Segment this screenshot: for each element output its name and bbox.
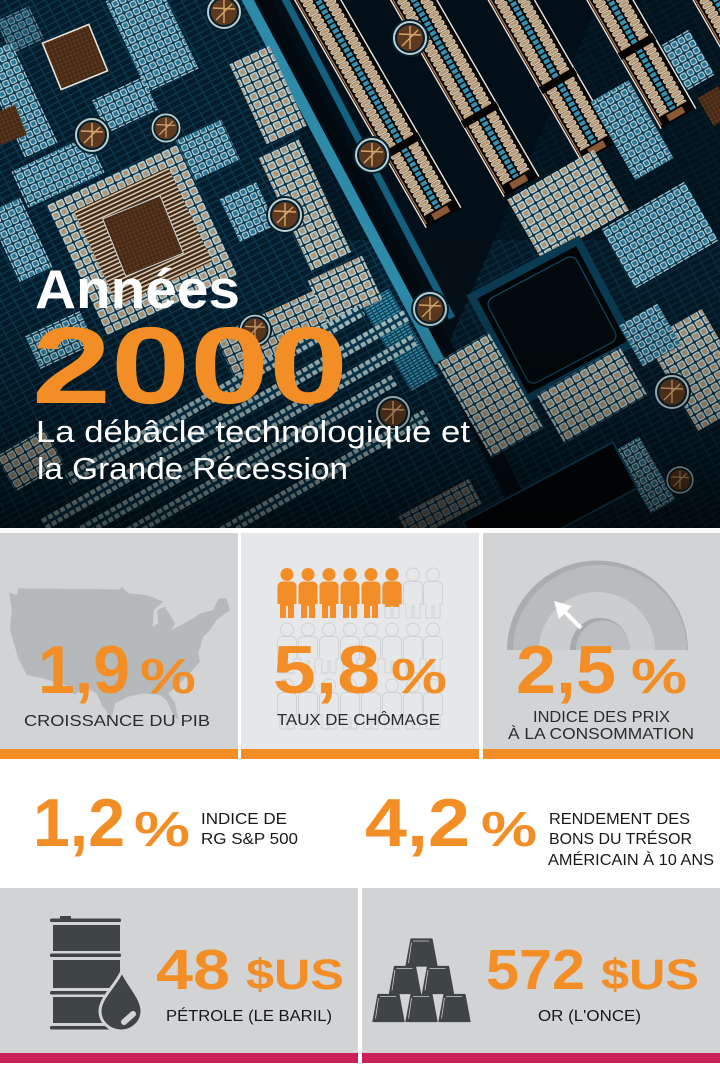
panel: or — [362, 888, 720, 1063]
icon: gauge — [507, 561, 688, 650]
panel: indice des prix à la consommation — [483, 533, 720, 759]
stat: rendement des bons du Trésor: % — [481, 803, 537, 857]
panel: pétrole — [0, 888, 358, 1063]
stat: rendement des bons du Trésor: RENDEMENT DES — [549, 811, 690, 828]
value: 2,5 %: 2,5 — [516, 632, 616, 708]
value: 2,5 %: % — [631, 650, 687, 704]
value: 572 $US: 572 — [486, 938, 585, 1002]
value: 1,9 %: % — [140, 650, 196, 704]
pad clusters — [105, 0, 199, 92]
title: 2000: 2000 — [32, 305, 348, 427]
icon: map of the United States — [9, 587, 230, 720]
teal strips — [245, 0, 440, 362]
value: 5,8 %: % — [391, 650, 447, 704]
stat: rendement des bons du Trésor: AMÉRICAIN À 10 ANS — [548, 850, 714, 869]
stat: indice de RG S&P 500 — [33, 785, 298, 861]
black chip — [472, 241, 632, 399]
right clusters — [507, 150, 629, 260]
label: indice des prix — [508, 709, 694, 743]
icon: people grid — [278, 568, 442, 729]
stat: rendement des bons du Trésor — [365, 785, 714, 869]
panel: or: $US — [601, 951, 699, 999]
stat: rendement des bons du Trésor: 4,2 — [365, 785, 470, 861]
icon: gold bars — [373, 939, 470, 1022]
subtitle: la Grande Récession — [37, 451, 348, 486]
value: 5,8 %: 5,8 — [273, 632, 380, 708]
label: or: OR (L'ONCE) — [538, 1008, 641, 1025]
brown chip top left — [42, 24, 108, 90]
big BGA — [46, 144, 238, 336]
stat: indice de RG S&P 500: RG S&P 500 — [201, 831, 298, 848]
value: 1,9 %: 1,9 — [38, 632, 130, 708]
stat: rendement des bons du Trésor: BONS DU TRÉSOR — [549, 829, 692, 848]
capacitors — [73, 116, 111, 154]
label: indice des prix: À LA CONSOMMATION — [508, 724, 694, 743]
label: indice des prix: INDICE DES PRIX — [533, 709, 670, 726]
stat: indice de RG S&P 500: % — [134, 803, 190, 857]
label: pétrole: PÉTROLE (LE BARIL) — [166, 1006, 332, 1025]
label: croissance du PIB: CROISSANCE DU PIB — [24, 713, 210, 730]
label: taux de chômage: TAUX DE CHÔMAGE — [277, 710, 440, 729]
subtitle — [36, 414, 470, 486]
mid and lower clusters — [437, 332, 543, 458]
subtitle: La débâcle technologique et — [36, 414, 470, 449]
hero photo: circuit board — [0, 0, 720, 528]
value: 48 $US: 48 — [156, 938, 230, 1002]
panel: croissance du PIB — [0, 533, 238, 759]
stat: indice de RG S&P 500: 1,2 — [33, 785, 125, 861]
panel: taux de chômage — [241, 533, 479, 759]
title: Années: Années — [35, 258, 240, 320]
icon: oil barrel and drop — [50, 916, 142, 1031]
panel: pétrole: $US — [246, 951, 344, 999]
value: 5,8 % — [273, 632, 447, 708]
stat: indice de RG S&P 500: INDICE DE — [201, 811, 287, 828]
value: 2,5 % — [516, 632, 687, 708]
value: 1,9 % — [38, 632, 196, 708]
